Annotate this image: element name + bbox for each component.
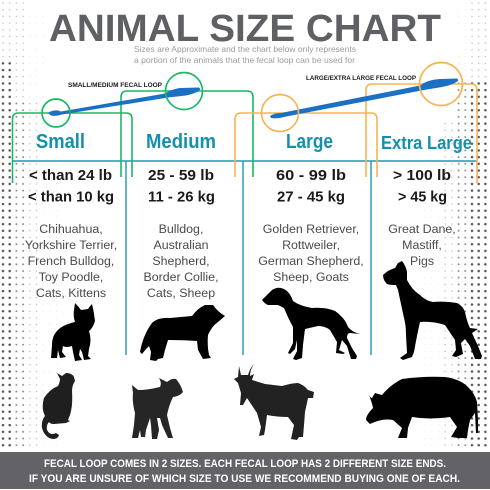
icon: cat [42, 373, 75, 439]
breeds: medium: Cats, Sheep [147, 286, 215, 300]
icon: golden retriever [262, 288, 360, 360]
icon: great dane [383, 261, 482, 360]
column grid lines [12, 161, 477, 355]
breeds: large: German Shepherd, [258, 254, 364, 268]
title: ANIMAL SIZE CHART [49, 8, 441, 50]
breeds: medium [143, 222, 219, 300]
green circle: medium end [166, 72, 202, 110]
large/extra large fecal loop tool [270, 75, 458, 118]
icon: lamb [132, 378, 183, 439]
orange bracket: large size [235, 113, 377, 177]
weights: large: 60 - 99 lb [276, 167, 346, 184]
breeds: extra large [388, 222, 456, 268]
breeds: large: Rottweiler, [282, 238, 340, 252]
halftone left [0, 0, 60, 450]
subtitle [134, 44, 356, 65]
breeds: small: Cats, Kittens [36, 286, 106, 300]
weights: medium [148, 167, 215, 206]
footer band [0, 452, 490, 489]
green bracket: medium size [121, 91, 253, 177]
icon: goat [234, 364, 314, 440]
breeds: large [258, 222, 364, 284]
label: small/medium loop: SMALL/MEDIUM FECAL LOOP [68, 82, 162, 89]
heading: small: Small [36, 131, 85, 153]
breeds: large: Golden Retriever, [263, 222, 359, 236]
heading: medium: Medium [146, 131, 216, 153]
breeds: small: French Bulldog, [28, 254, 114, 268]
footer text [29, 458, 460, 485]
icon: australian shepherd [140, 305, 225, 361]
breeds: medium: Shepherd, [152, 254, 210, 268]
breeds: small: Yorkshire Terrier, [25, 238, 117, 252]
breeds: extra large: Mastiff, [402, 238, 442, 252]
breeds: small [25, 222, 117, 300]
breeds: extra large: Great Dane, [388, 222, 456, 236]
weights: extra large: > 45 kg [398, 188, 447, 206]
weights: extra large [393, 167, 451, 206]
orange circle: extra large end [420, 62, 462, 106]
breeds: large: Sheep, Goats [273, 270, 349, 284]
weights: small: < than 24 lb [29, 167, 112, 184]
halftone right [422, 0, 490, 450]
breeds: medium: Border Collie, [143, 270, 219, 284]
weights: extra large: > 100 lb [393, 167, 451, 184]
breeds: extra large: Pigs [410, 254, 434, 268]
orange circle: large end [262, 94, 298, 132]
weights: medium: 25 - 59 lb [148, 167, 214, 184]
weights: large [276, 167, 346, 206]
heading: large: Large [286, 131, 333, 153]
footer text: FECAL LOOP COMES IN 2 SIZES. EACH FECAL LOOP HAS 2 DIFFERENT SIZE ENDS. [44, 458, 446, 470]
orange bracket: extra large size [366, 84, 477, 183]
weights: medium: 11 - 26 kg [148, 188, 215, 206]
green bracket: small size [12, 113, 132, 183]
weights: small [28, 167, 114, 206]
small/medium fecal loop tool [48, 82, 200, 116]
heading: extra large: Extra Large [381, 133, 472, 153]
icon: french bulldog [51, 303, 95, 361]
label: large/extra large loop: LARGE/EXTRA LARGE FECAL LOOP [306, 75, 416, 82]
breeds: medium: Australian [153, 238, 209, 252]
icon: pig [366, 377, 478, 438]
weights: large: 27 - 45 kg [277, 188, 345, 206]
weights: small: < than 10 kg [28, 188, 114, 206]
green circle: small end [42, 99, 70, 127]
breeds: small: Chihuahua, [39, 222, 103, 236]
breeds: small: Toy Poodle, [39, 270, 103, 284]
subtitle: a portion of the animals that the fecal loop can be used for [134, 55, 355, 65]
breeds: medium: Bulldog, [159, 222, 203, 236]
footer text: IF YOU ARE UNSURE OF WHICH SIZE TO USE WE RECOMMEND BUYING ONE OF EACH. [29, 473, 460, 485]
subtitle: Sizes are Approximate and the chart below only represents [134, 44, 356, 54]
